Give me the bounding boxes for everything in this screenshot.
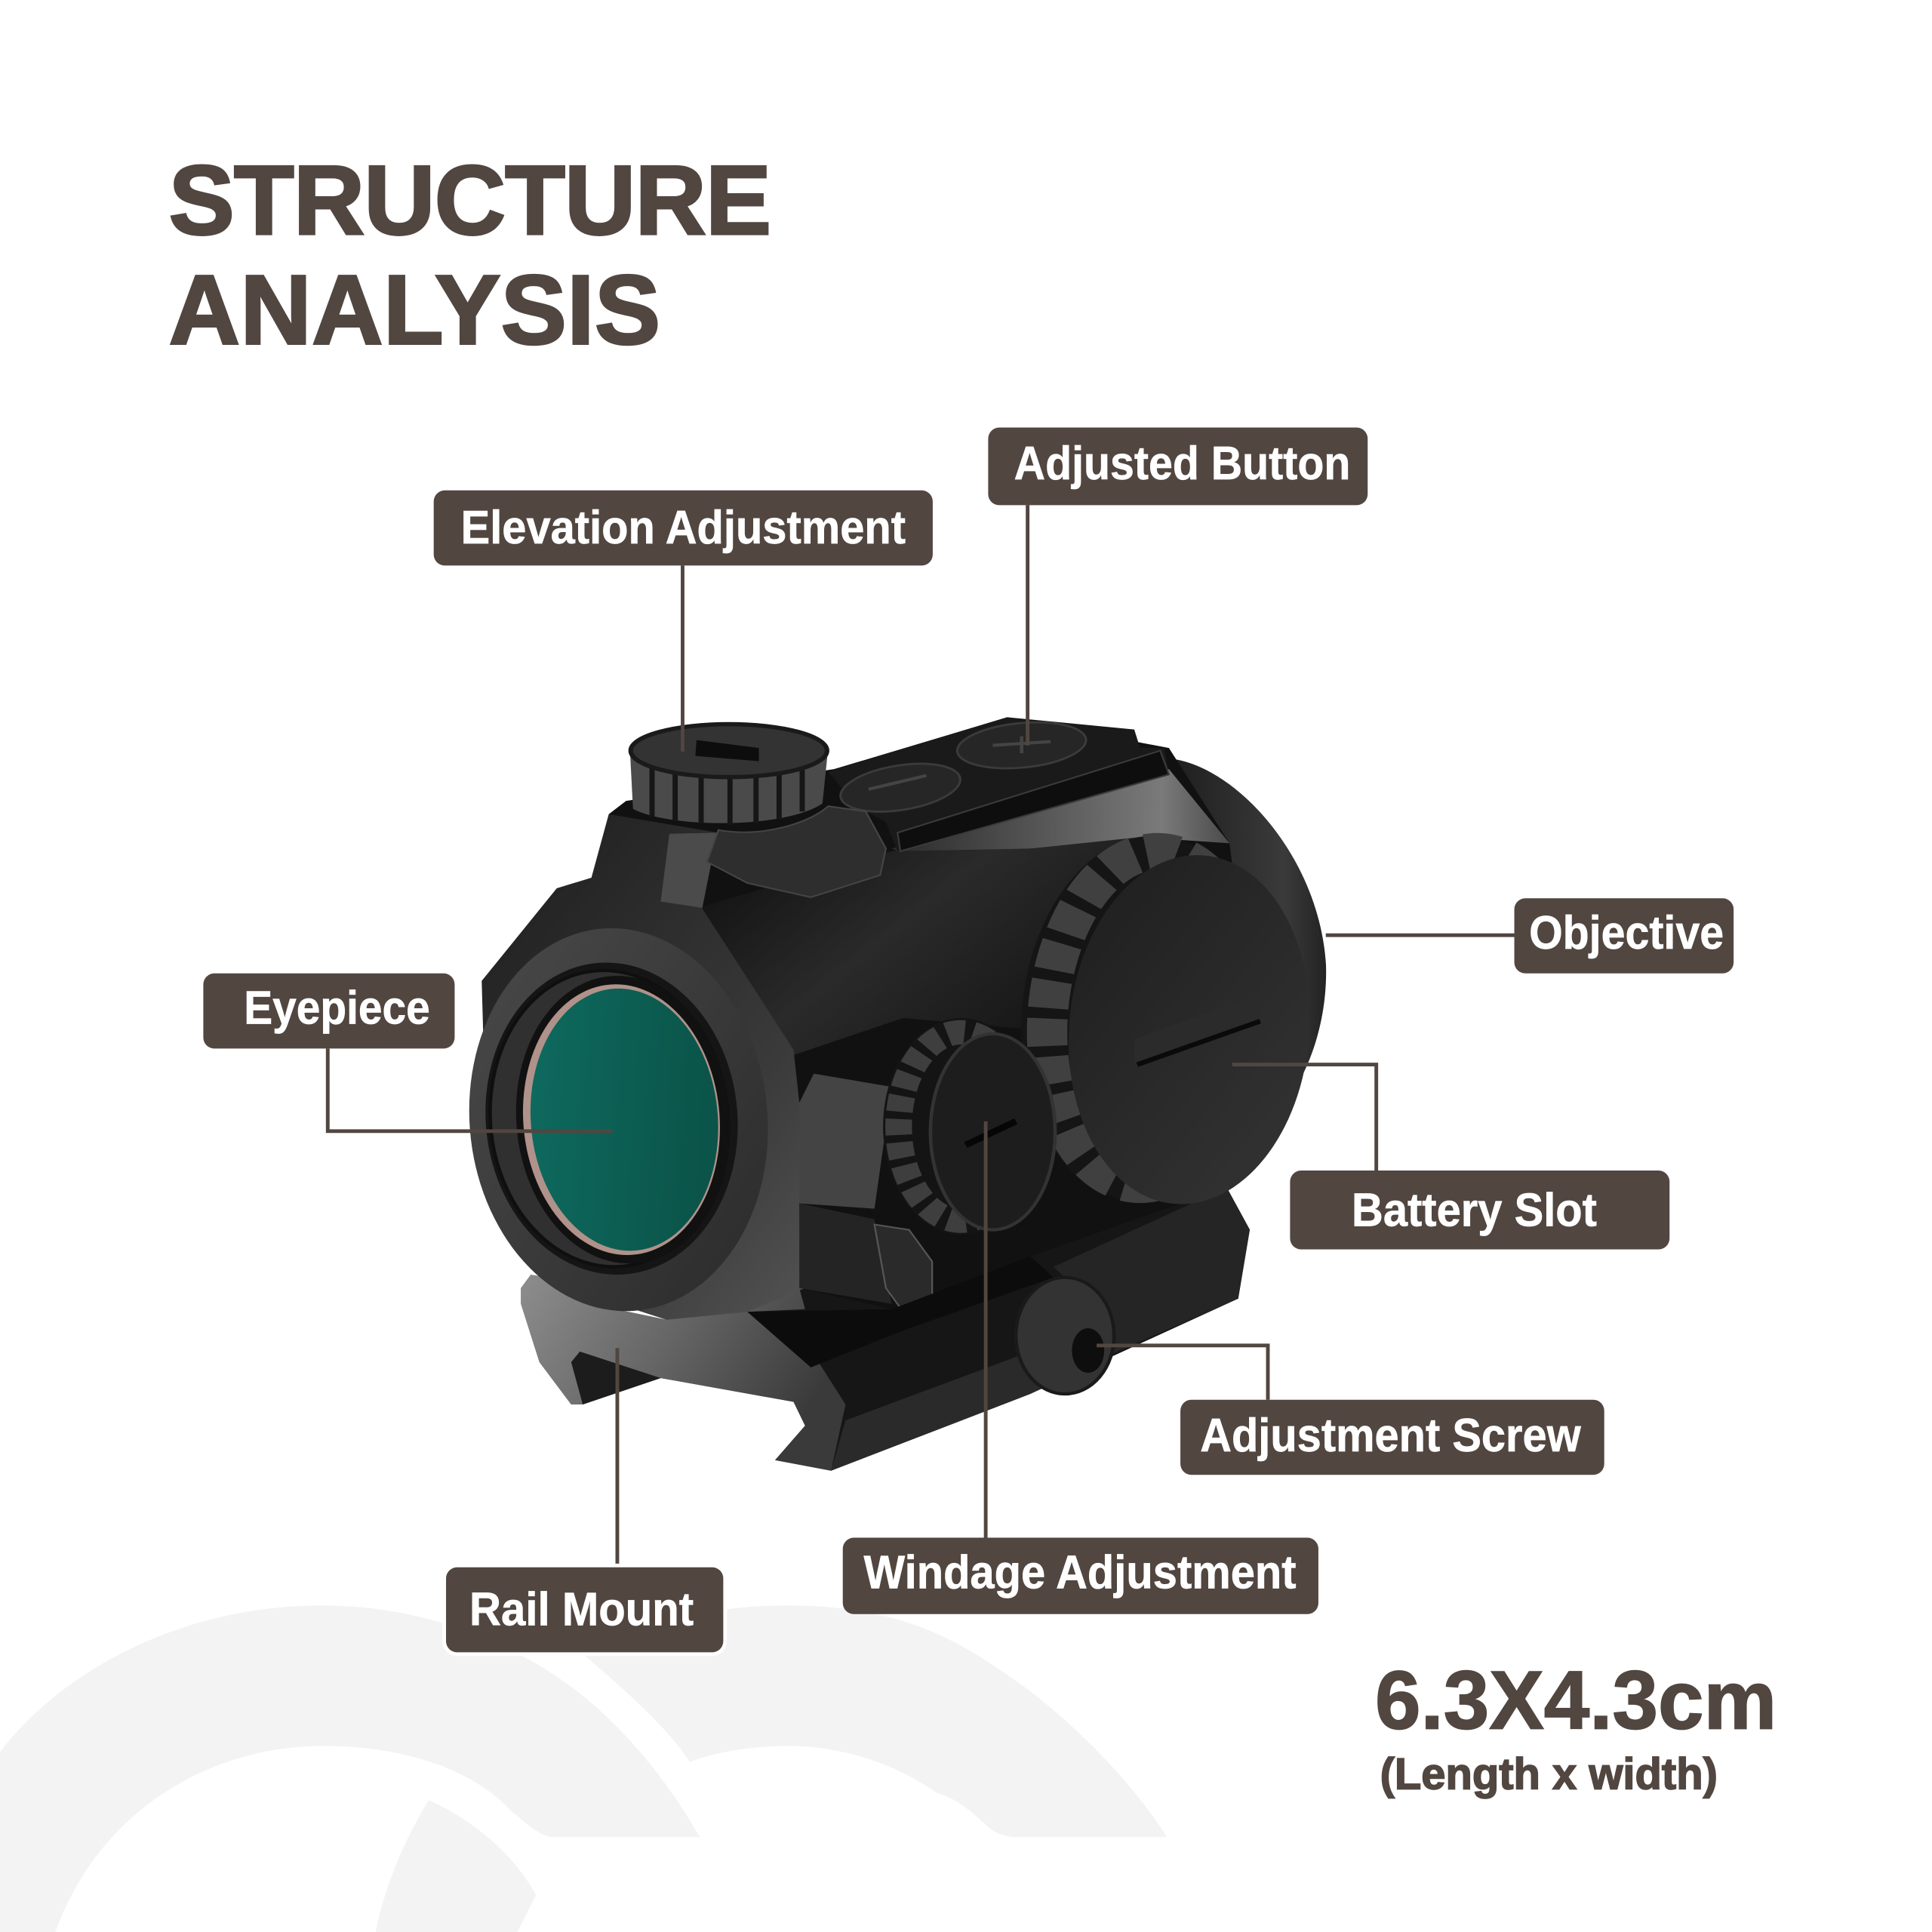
label: Adjustment Screw: Adjustment Screw — [1200, 1410, 1581, 1462]
label: Windage Adjustment — [843, 1538, 1318, 1614]
screw socket — [1072, 1328, 1104, 1373]
rail rib — [897, 751, 1169, 851]
title: ANALYSIS — [169, 255, 660, 365]
lug — [660, 832, 717, 908]
windage slot — [966, 1121, 1016, 1145]
lower side recess — [799, 1203, 892, 1304]
rail lower strip — [831, 1352, 1106, 1471]
lens surround — [506, 969, 740, 1270]
label: Battery Slot — [1290, 1171, 1669, 1250]
windage block — [799, 1074, 892, 1208]
eyepiece outer ring — [455, 919, 782, 1321]
battery slot — [1134, 995, 1261, 1066]
rail groove — [747, 1257, 1054, 1367]
label: Eyepiece: Eyepiece — [244, 983, 430, 1035]
elevation knob top — [631, 724, 827, 777]
eyepiece recess — [474, 955, 749, 1282]
top button plate — [828, 717, 1169, 851]
label: Adjusted Button — [988, 428, 1367, 505]
label: Windage Adjustment: Windage Adjustment — [863, 1546, 1297, 1598]
title — [169, 145, 771, 365]
dimensions: 6.3X4.3cm — [1375, 1655, 1777, 1747]
windage strap — [875, 1225, 932, 1312]
label: Rail Mount — [446, 1567, 723, 1652]
minus button — [836, 756, 964, 820]
label: Rail Mount: Rail Mount — [469, 1583, 694, 1635]
lens rim — [513, 978, 730, 1261]
elevation slot — [695, 740, 759, 761]
label: Elevation Adjustment — [434, 491, 933, 565]
background watermark — [0, 1605, 1167, 1932]
body silhouette backing — [609, 717, 1261, 1367]
plus button — [955, 717, 1088, 774]
windage knob base — [883, 1018, 1039, 1235]
eyepiece thread — [479, 963, 738, 1274]
dimensions: (Length x width) — [1380, 1750, 1718, 1799]
elevation strap — [707, 806, 886, 897]
objective housing — [1117, 758, 1326, 1118]
battery cap — [1056, 848, 1322, 1211]
red dot sight product illustration — [455, 717, 1326, 1471]
base front face — [521, 1275, 845, 1471]
lens — [521, 983, 728, 1257]
windage knob knurl — [899, 1032, 1023, 1221]
front hex housing — [481, 814, 892, 1320]
main body — [701, 835, 1158, 1055]
adjustment screw — [1016, 1278, 1114, 1394]
label: Adjustment Screw — [1180, 1400, 1604, 1475]
battery knob base — [1008, 828, 1284, 1208]
windage cap — [931, 1034, 1055, 1230]
knurl ridges — [652, 761, 802, 825]
button symbols — [869, 737, 1051, 789]
label: Elevation Adjustment: Elevation Adjustment — [461, 502, 906, 554]
title: STRUCTURE — [169, 145, 771, 255]
mounting base — [521, 1187, 1250, 1471]
rail clamp — [1054, 1187, 1250, 1357]
top surface of body — [892, 769, 1229, 854]
label: Battery Slot: Battery Slot — [1352, 1184, 1597, 1236]
label: Eyepiece — [203, 974, 454, 1048]
dimensions — [1375, 1655, 1777, 1799]
label: Objective: Objective — [1529, 907, 1724, 959]
battery knob knurl — [1035, 845, 1262, 1191]
base notch — [571, 1352, 660, 1404]
elevation knob knurl — [630, 748, 828, 823]
label: Adjusted Button: Adjusted Button — [1014, 438, 1350, 490]
leader lines — [328, 505, 1515, 1567]
label: Objective — [1515, 898, 1734, 974]
